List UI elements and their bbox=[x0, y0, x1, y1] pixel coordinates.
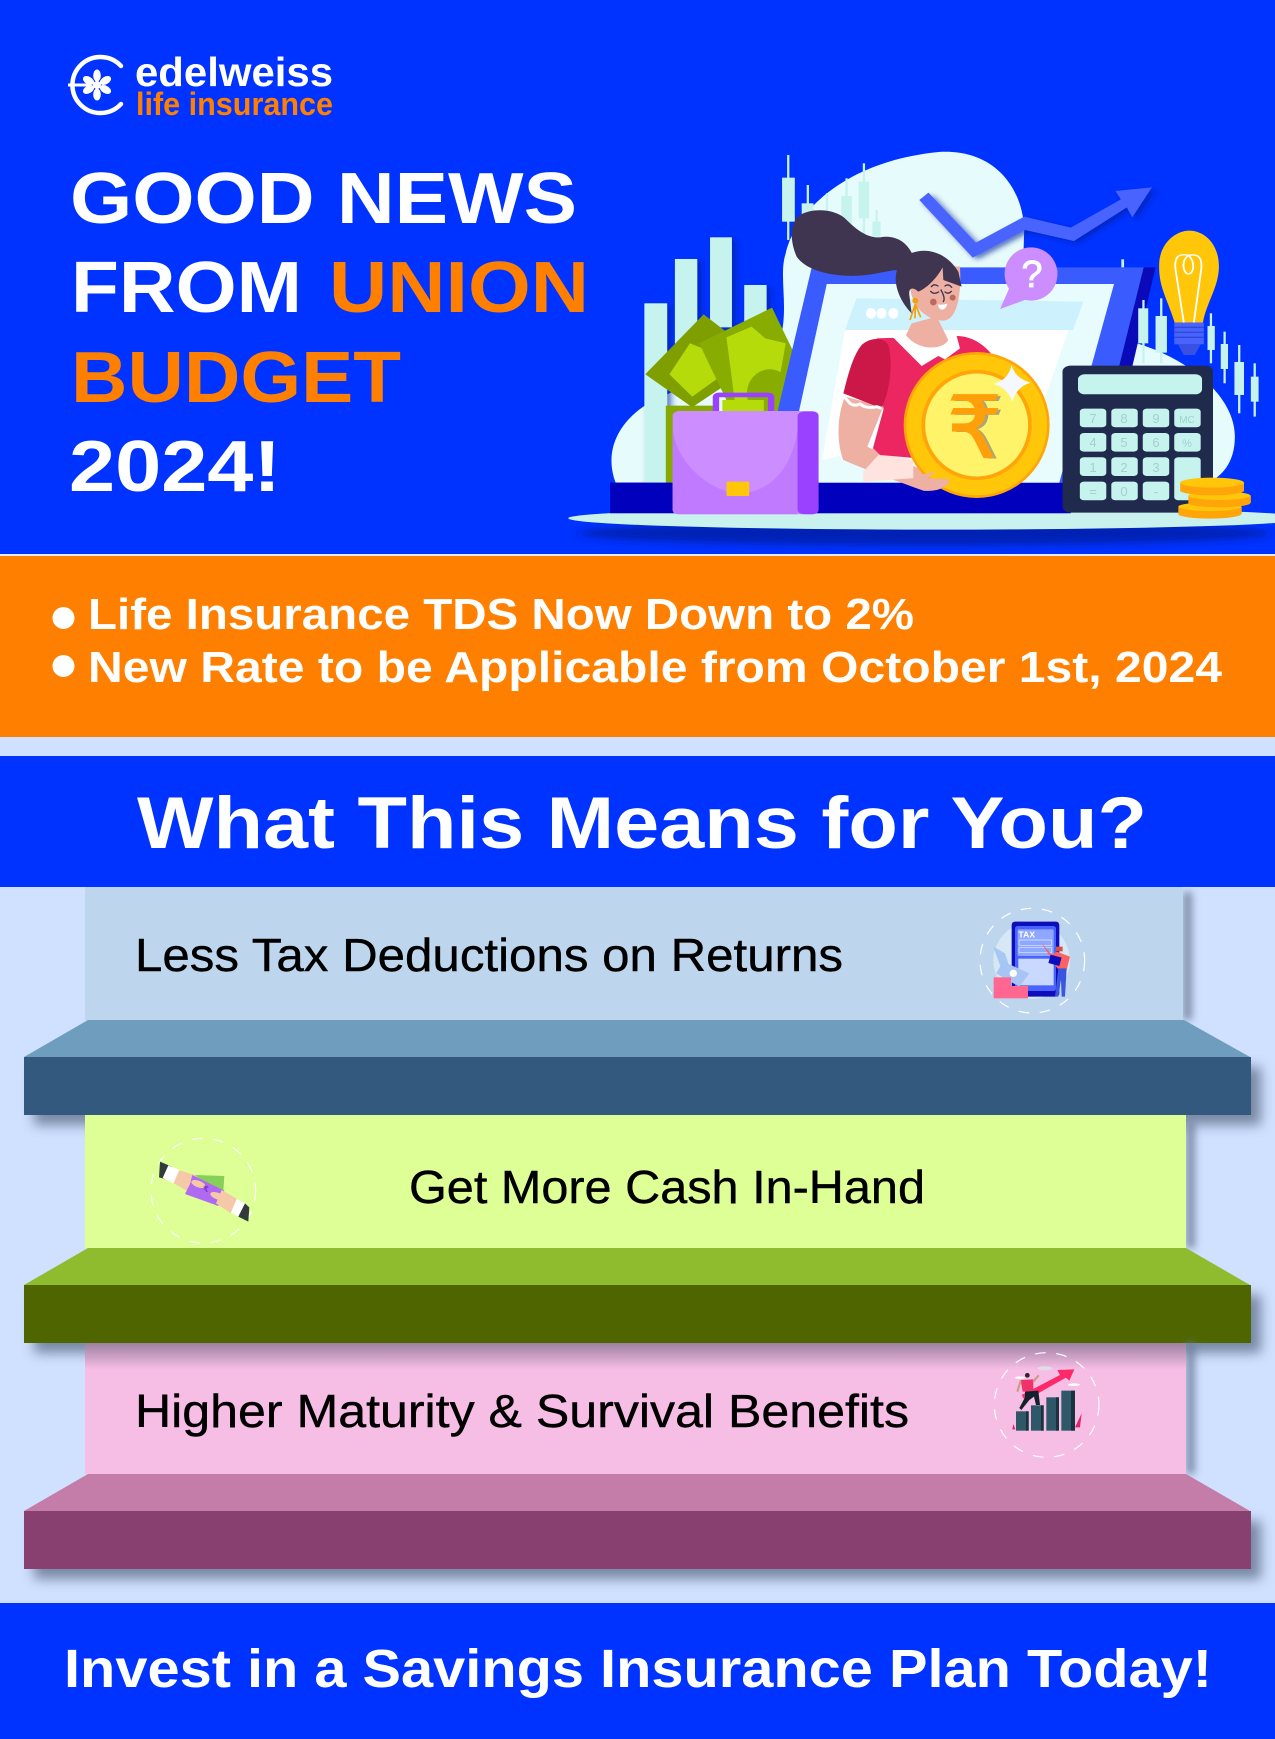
icon: calculator: % bbox=[1182, 438, 1192, 450]
bars bbox=[644, 237, 767, 483]
icon: calculator: - bbox=[1154, 484, 1158, 499]
title: UNION bbox=[329, 248, 589, 328]
panel side shadow bbox=[1183, 892, 1192, 1020]
head bbox=[910, 263, 960, 321]
title: FROM bbox=[71, 248, 302, 328]
icon: cash exchange between hands: ₹ bbox=[203, 1185, 209, 1195]
neck and collar bbox=[892, 336, 960, 366]
icon: coin stack bbox=[1178, 478, 1251, 519]
shelf front bbox=[24, 1511, 1251, 1569]
floor ellipse bbox=[568, 507, 1275, 530]
arm bbox=[839, 397, 948, 491]
icon: person climbing bars bbox=[994, 1353, 1099, 1457]
icon: rupee coin bbox=[905, 353, 1048, 497]
icon: calculator: 9 bbox=[1152, 411, 1160, 426]
panel side shadow bbox=[1186, 1122, 1195, 1248]
logo tagline: life insurance bbox=[136, 86, 333, 122]
panel: step 1 less tax deductions bbox=[85, 887, 1192, 1020]
icon: banknotes bbox=[645, 308, 793, 483]
shelf 1 bbox=[24, 1020, 1261, 1125]
panel: orange key points bbox=[0, 556, 1275, 737]
shelf top bbox=[24, 1474, 1250, 1511]
step text: Higher Maturity & Survival Benefits bbox=[135, 1385, 909, 1437]
icon: calculator: 6 bbox=[1152, 435, 1160, 450]
panel: call to action footer: Invest in a Savings Insurance Plan Today! bbox=[64, 1639, 1212, 1699]
rising arrow bbox=[919, 187, 1152, 258]
title bbox=[69, 159, 589, 507]
title: GOOD NEWS bbox=[70, 159, 577, 239]
icon: logo emblem bbox=[68, 57, 121, 113]
woman with rupee coin bbox=[792, 210, 1048, 497]
icon: light bulb bbox=[1159, 231, 1219, 355]
dress bbox=[872, 336, 993, 460]
icon: calculator: MC bbox=[1179, 415, 1195, 426]
icon: calculator: 7 bbox=[1089, 411, 1097, 426]
floor shadow bbox=[578, 521, 1271, 545]
icon: rupee coin: ₹ bbox=[951, 380, 1005, 480]
panel: step 3 higher benefits bbox=[85, 1343, 1195, 1474]
candles: left bbox=[782, 155, 881, 240]
icon: calculator bbox=[1063, 366, 1213, 513]
step text: Less Tax Deductions on Returns bbox=[135, 929, 843, 981]
icon: cash exchange between hands bbox=[151, 1138, 256, 1243]
ponytail bbox=[792, 210, 912, 276]
shelf front bbox=[24, 1285, 1251, 1343]
icon: calculator: 4 bbox=[1089, 435, 1097, 450]
bullet: effective date: New Rate to be Applicable from October 1st, 2024 bbox=[88, 643, 1223, 692]
step text: Get More Cash In-Hand bbox=[409, 1161, 925, 1213]
icon: rupee coin: ₹ bbox=[947, 378, 1002, 478]
icon: tax form bbox=[980, 908, 1085, 1013]
shelf top bbox=[24, 1020, 1250, 1057]
icon: calculator: 1 bbox=[1089, 460, 1097, 475]
bullet: TDS rate: Life Insurance TDS Now Down to 2% bbox=[88, 590, 914, 639]
panel: header bbox=[0, 0, 1275, 554]
panel: step 2 more cash in hand bbox=[85, 1115, 1195, 1248]
panel: call to action footer bbox=[0, 1603, 1275, 1739]
hand bbox=[913, 472, 950, 491]
laptop back bbox=[1119, 267, 1156, 367]
shelf front bbox=[24, 1057, 1251, 1115]
icon: calculator: 5 bbox=[1120, 435, 1128, 450]
shelf shadow bbox=[34, 1295, 1261, 1353]
panel side shadow bbox=[1186, 1343, 1195, 1474]
shelf top bbox=[24, 1248, 1250, 1285]
icon: calculator: 3 bbox=[1152, 460, 1160, 475]
shelf 3 bbox=[24, 1474, 1261, 1579]
header divider bbox=[0, 554, 1275, 556]
title: BUDGET bbox=[71, 338, 401, 418]
icon: calculator: 2 bbox=[1120, 460, 1128, 475]
question mark: ? bbox=[1021, 254, 1043, 296]
shelf shadow bbox=[34, 1521, 1261, 1579]
shelf 2 bbox=[24, 1248, 1261, 1353]
logo: edelweiss life insurance bbox=[68, 49, 333, 122]
platform bbox=[610, 483, 1071, 513]
icon: calculator: 8 bbox=[1120, 411, 1128, 426]
title: 2024! bbox=[69, 427, 281, 507]
illustration: woman with rupee coin, laptop and finance objects bbox=[568, 152, 1275, 545]
icon: calculator: = bbox=[1089, 484, 1097, 499]
panel: section heading: What This Means for You? bbox=[137, 783, 1147, 864]
shelf shadow bbox=[34, 1067, 1261, 1125]
panel: section heading bbox=[0, 756, 1275, 887]
logo wordmark: edelweiss bbox=[135, 49, 333, 95]
background blob bbox=[611, 152, 1235, 483]
icon: briefcase bbox=[673, 395, 819, 514]
icon: calculator: 0 bbox=[1120, 484, 1128, 499]
speech bubble shape bbox=[1000, 247, 1057, 309]
icon: tax form: TAX bbox=[1018, 930, 1035, 940]
candles: right bbox=[1121, 259, 1259, 417]
laptop screen bbox=[783, 284, 1114, 483]
